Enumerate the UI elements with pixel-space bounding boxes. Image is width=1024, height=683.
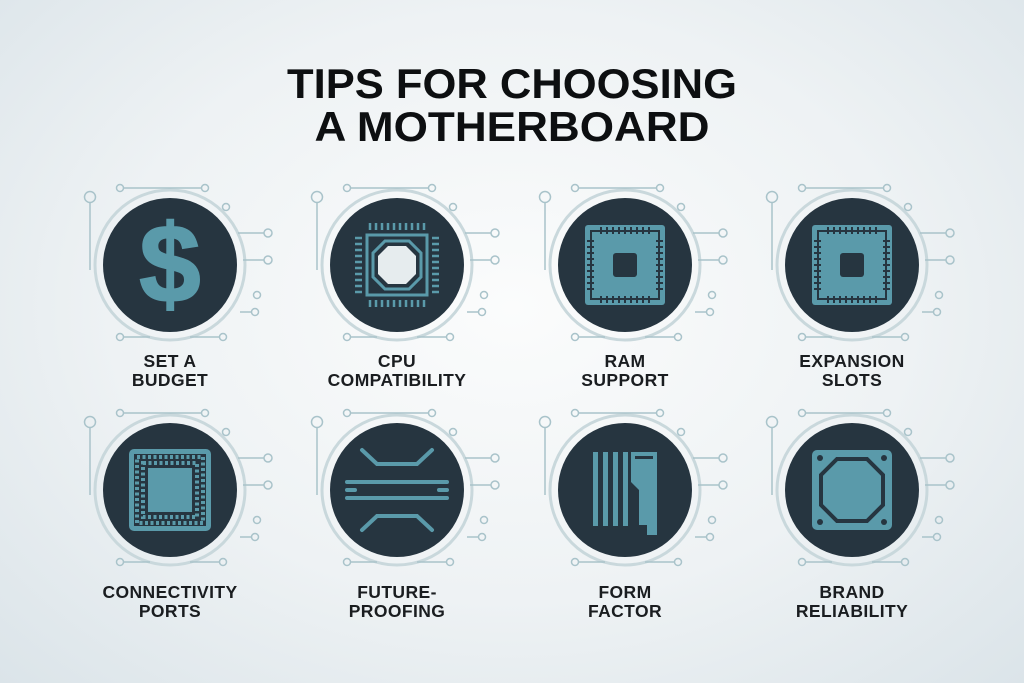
title	[287, 60, 737, 150]
label: BUDGET	[132, 370, 208, 390]
icon: bga chip	[129, 449, 211, 531]
icon: chip	[585, 225, 665, 305]
label: EXPANSION	[799, 351, 905, 371]
icon: dollar: $	[139, 203, 201, 326]
label: BRAND	[819, 582, 885, 602]
panel: ram support	[540, 184, 727, 390]
label: CPU	[378, 351, 416, 371]
label: COMPATIBILITY	[328, 370, 466, 390]
icon: socket	[812, 450, 892, 530]
title: A MOTHERBOARD	[314, 103, 710, 150]
panel: brand reliability	[766, 410, 954, 621]
panel: expansion slots	[766, 184, 954, 390]
label: RELIABILITY	[796, 601, 908, 621]
panel: form factor	[540, 410, 727, 621]
label: PROOFING	[349, 601, 445, 621]
icon: cpu	[355, 223, 439, 307]
panel: cpu compatibility	[312, 184, 499, 390]
title: TIPS FOR CHOOSING	[287, 60, 737, 107]
label: PORTS	[139, 601, 201, 621]
label: CONNECTIVITY	[102, 582, 238, 602]
label: SET A	[144, 351, 196, 371]
label: SLOTS	[822, 370, 882, 390]
label: SUPPORT	[581, 370, 669, 390]
icon: chip	[812, 225, 892, 305]
icon: traces	[347, 450, 447, 530]
panel: future-proofing	[312, 410, 499, 621]
label: FORM	[598, 582, 652, 602]
panel: connectivity ports	[84, 410, 272, 621]
label: FUTURE-	[357, 582, 437, 602]
icon: board	[593, 452, 657, 535]
label: RAM	[604, 351, 646, 371]
panel: set a budget	[84, 184, 272, 390]
label: FACTOR	[588, 601, 662, 621]
